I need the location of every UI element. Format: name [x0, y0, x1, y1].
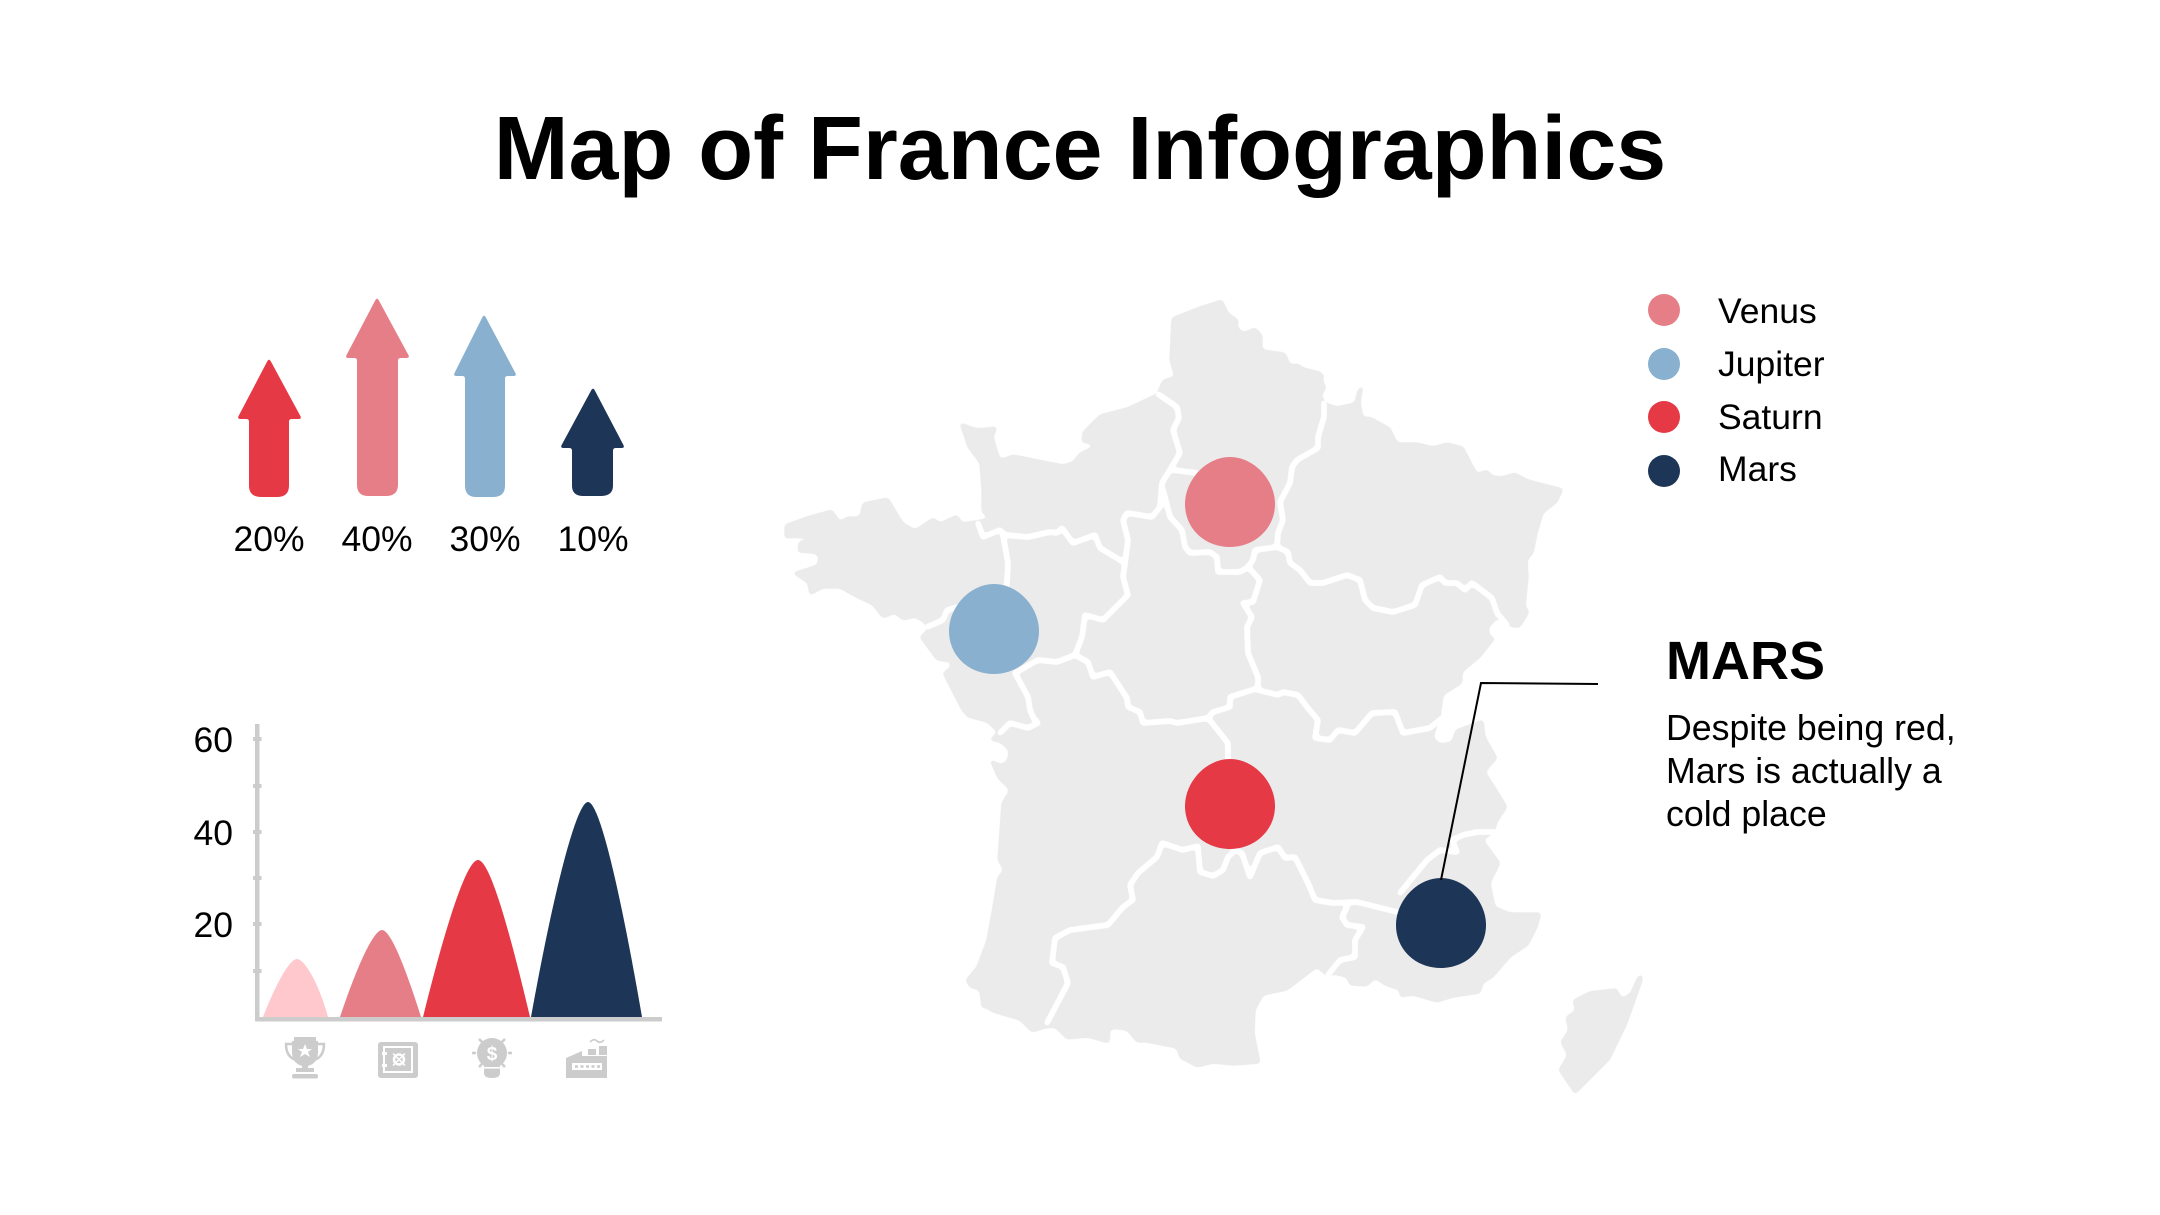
callout: Mars	[1666, 631, 1956, 834]
y axis labels: 60	[194, 720, 233, 760]
callout body: Despite being red,	[1666, 708, 1956, 748]
legend item: Saturn	[1648, 397, 1823, 437]
callout heading: MARS	[1666, 631, 1825, 691]
legend item: Jupiter	[1648, 344, 1825, 384]
area peak chart	[194, 720, 662, 1078]
legend item: Venus: Venus	[1718, 291, 1817, 331]
chart axes	[253, 724, 662, 1022]
legend item: Saturn: Saturn	[1718, 397, 1823, 437]
arrow: 20% red	[233, 358, 305, 559]
marker: Jupiter	[949, 584, 1039, 674]
map: region borders	[927, 394, 1507, 1023]
y axis labels: 20	[194, 905, 233, 945]
arrow: 10% navy: 10%	[557, 519, 629, 559]
y axis labels: 40	[194, 813, 233, 853]
title: Map of France Infographics	[494, 99, 1666, 199]
map: Corsica	[1558, 973, 1643, 1095]
peak: light pink	[263, 959, 328, 1017]
callout body: cold place	[1666, 794, 1827, 834]
callout leader line	[1441, 683, 1598, 880]
arrow: 40% pink: 40%	[341, 519, 413, 559]
marker: Mars	[1396, 878, 1486, 968]
arrow: 40% pink	[341, 297, 413, 559]
map of France	[785, 300, 1643, 1095]
marker: Saturn	[1185, 759, 1275, 849]
peak: navy	[531, 802, 642, 1017]
peak: pink	[340, 930, 421, 1017]
icon: light bulb	[472, 1038, 512, 1078]
arrow chart	[233, 297, 629, 559]
marker: Venus	[1185, 457, 1275, 547]
legend item: Venus	[1648, 291, 1817, 331]
icon: light bulb: $	[487, 1044, 498, 1065]
arrow: 20% red: 20%	[233, 519, 305, 559]
icon: safe	[378, 1042, 418, 1078]
legend item: Mars	[1648, 449, 1797, 489]
arrow: 30% blue: 30%	[449, 519, 521, 559]
map: mainland silhouette	[785, 300, 1563, 1067]
legend item: Jupiter: Jupiter	[1718, 344, 1825, 384]
legend item: Mars: Mars	[1718, 449, 1797, 489]
legend	[1648, 291, 1825, 489]
arrow: 10% navy	[557, 387, 629, 559]
arrow: 30% blue	[449, 314, 521, 559]
icon: factory	[566, 1040, 607, 1078]
icon: trophy	[286, 1037, 324, 1078]
callout body: Mars is actually a	[1666, 751, 1942, 791]
peak: red	[423, 860, 530, 1017]
y axis labels	[194, 720, 233, 945]
